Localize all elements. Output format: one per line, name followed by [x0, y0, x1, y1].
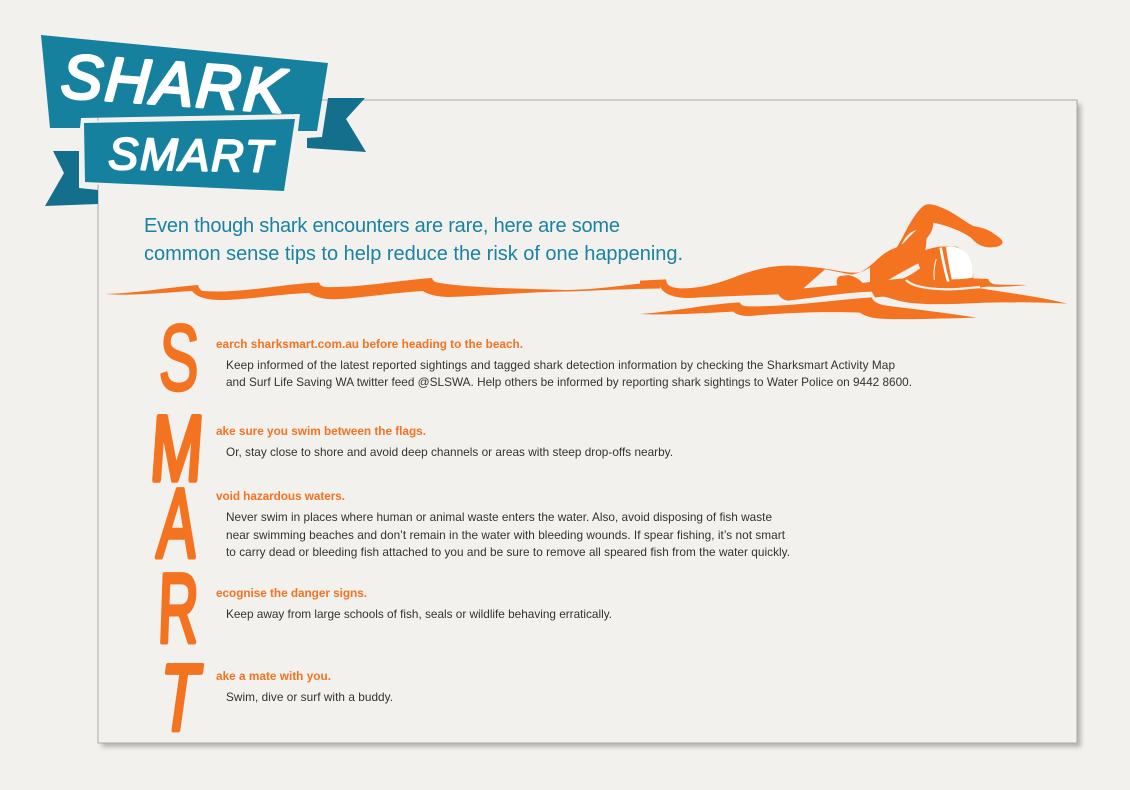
letter S: S: [157, 305, 201, 410]
logo word: SHARK: SHARK: [59, 42, 290, 127]
intro text: [144, 215, 683, 265]
tip A: near swimming beaches and don’t remain in the water with bleeding wounds. If spear fishing, it’s not smart: [226, 528, 786, 542]
tip T: Swim, dive or surf with a buddy.: [226, 690, 393, 704]
letter R: R: [156, 554, 201, 663]
intro text: Even though shark encounters are rare, here are some: [144, 215, 620, 237]
logo word: SMART: SMART: [108, 128, 276, 182]
tip A: void hazardous waters.: [216, 489, 345, 503]
logo: Shark Smart banner: [41, 35, 366, 206]
banner main ribbon: [41, 35, 328, 131]
tip R: Keep away from large schools of fish, seals or wildlife behaving erratically.: [226, 607, 612, 621]
tip M: [216, 424, 673, 459]
tip A: Never swim in places where human or animal waste enters the water. Also, avoid disposing of fish waste: [226, 510, 772, 524]
intro text: common sense tips to help reduce the risk of one happening.: [144, 243, 683, 265]
tip S: [216, 337, 912, 389]
swim cap: [946, 247, 973, 279]
letter M: M: [148, 397, 206, 500]
acrostic letters: [148, 305, 207, 750]
banner left tail: [45, 151, 98, 206]
swimmer body: [640, 204, 1067, 319]
tip R: [216, 586, 612, 621]
tip S: Keep informed of the latest reported sightings and tagged shark detection information by checking the Sharksmart Activity Map: [226, 358, 895, 372]
tip R: ecognise the danger signs.: [216, 586, 367, 600]
tip S: earch sharksmart.com.au before heading to the beach.: [216, 337, 523, 351]
wave: lower ribbon: [640, 297, 977, 319]
swimsuit highlights: [803, 269, 853, 288]
tip M: Or, stay close to shore and avoid deep channels or areas with steep drop-offs nearby.: [226, 445, 673, 459]
tip A: to carry dead or bleeding fish attached to you and be sure to remove all speared fish from the water quickly.: [226, 545, 790, 559]
banner right tail: [307, 98, 366, 152]
tip M: ake sure you swim between the flags.: [216, 424, 426, 438]
panel: tips card: [98, 100, 1081, 747]
wave: left ribbon: [105, 278, 660, 300]
banner lower ribbon: [84, 119, 295, 191]
tip S: and Surf Life Saving WA twitter feed @SLSWA. Help others be informed by reporting shark sightings to Water Police on 9442 8600.: [226, 375, 912, 389]
tip T: [216, 669, 393, 704]
illustration: swimmer and waves: [105, 204, 1067, 319]
letter T: T: [154, 644, 207, 750]
tip T: ake a mate with you.: [216, 669, 331, 683]
tip A: [216, 489, 790, 559]
letter A: A: [154, 470, 201, 579]
